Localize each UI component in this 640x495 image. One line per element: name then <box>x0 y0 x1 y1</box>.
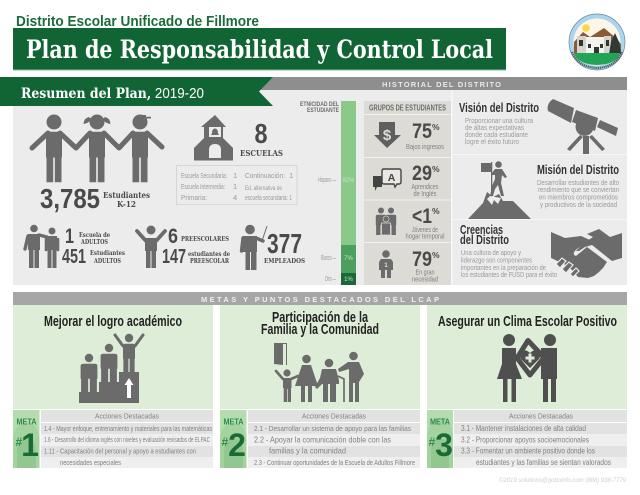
schools count <box>240 118 283 159</box>
ethnicity chart: 92% <box>342 178 355 184</box>
goal 2 badge: 2 <box>228 427 246 463</box>
icon: climber on mountain <box>468 161 531 219</box>
adult school stats: Estudiantes <box>90 249 125 257</box>
icon: three K-12 students <box>32 114 162 182</box>
main title: Plan de Responsabilidad y Control Local <box>26 35 493 64</box>
mission text: rendimiento que se conviertan <box>538 185 619 194</box>
ethnicity chart <box>300 101 356 285</box>
goal 3 actions table <box>454 410 627 468</box>
beliefs heading <box>460 223 509 247</box>
mission text <box>537 178 619 209</box>
goal 2 heading: Participación de la <box>272 309 368 326</box>
panel: goal 2 <box>220 305 420 468</box>
stat: English learners: Aprendices <box>412 184 439 191</box>
preschool stats: PREESCOLARES <box>181 236 229 243</box>
icon: foster family <box>376 208 396 235</box>
icon: low income arrow <box>374 122 401 148</box>
goal 1 badge: META <box>16 416 36 426</box>
panel: goal 1 <box>13 305 213 468</box>
panel divider <box>451 90 452 285</box>
icon: high need student: 1 <box>384 262 388 269</box>
chart heading: ETNICIDAD DEL <box>300 102 339 108</box>
title banner <box>13 28 506 70</box>
goals header label: METAS Y PUNTOS DESTACADOS DEL LCAP <box>201 295 439 304</box>
stat: foster youth: <1 <box>412 205 432 228</box>
goal 2 actions table: familias y la comunidad <box>269 446 346 456</box>
stat: English learners: % <box>432 164 440 174</box>
plan summary ribbon <box>0 77 273 106</box>
stat: high need: 79 <box>412 248 432 271</box>
goal 1 badge: 1 <box>21 427 39 463</box>
vision text: donde cada estudiante <box>465 130 528 139</box>
schools breakdown table: Primaria: <box>181 193 207 202</box>
goal 2 actions table: 2.3 - Continuar oportunidades de la Escuela de Adultos Fillmore <box>254 458 415 467</box>
goal 3 actions table: 3.1 - Mantener instalaciones de alta calidad <box>461 424 586 433</box>
icon: preschool child arms raised <box>137 226 165 268</box>
K-12 students count: Estudiantes <box>103 190 150 200</box>
stat: foster youth <box>406 205 445 240</box>
ethnicity chart: Blanco — <box>321 255 336 262</box>
goal 3 actions table: estudiantes y las familias se sientan valorados <box>476 458 611 467</box>
ethnicity chart: 1% <box>344 277 354 283</box>
stat: high need <box>412 248 440 284</box>
goal 1 badge: # <box>16 435 22 449</box>
goal 1 actions table: Acciones Destacadas <box>95 414 159 420</box>
schools count: ESCUELAS <box>240 149 283 159</box>
mission text: en miembros comprometidos <box>539 192 618 202</box>
icon: teacher with pointer <box>242 225 267 270</box>
goal 2 heading <box>261 309 379 338</box>
stat: high need: En gran <box>416 270 435 276</box>
goal 2 actions table <box>248 410 420 468</box>
icon: handshake <box>551 229 622 278</box>
goal 1 badge <box>13 410 40 468</box>
goal 3 badge <box>427 410 453 468</box>
preschool stats <box>162 225 230 268</box>
goal 3 badge: META <box>430 416 450 426</box>
history header bar <box>259 77 627 90</box>
goal 3 badge: 3 <box>435 427 453 463</box>
beliefs heading: Creencias <box>460 223 503 237</box>
adult school stats: ADULTOS <box>80 238 108 246</box>
student groups panel <box>364 101 451 285</box>
vision text: de altas expectativas <box>465 123 524 132</box>
goal 3 actions table: Acciones Destacadas <box>509 414 573 420</box>
icon: two people forming a heart <box>497 334 557 402</box>
goal 2 actions table: 2.2 - Apoyar la comunicación doble con las <box>254 434 391 444</box>
icon: podium with three people <box>79 334 143 403</box>
schools breakdown table: 4 <box>233 193 237 202</box>
schools count: 8 <box>254 118 268 149</box>
preschool stats: 6 <box>168 225 178 248</box>
beliefs text <box>461 248 557 279</box>
icon: schoolhouse <box>194 115 233 160</box>
icon: two adults <box>25 225 58 268</box>
goal 2 actions table: 2.1 - Desarrollar un sistema de apoyo para las familias <box>254 424 411 433</box>
ethnicity chart: Hispano — <box>318 177 336 184</box>
chart heading <box>300 102 339 114</box>
stat: low income: 75 <box>412 120 432 143</box>
district logo <box>569 14 625 70</box>
beliefs heading: del Distrito <box>460 233 509 247</box>
goal 1 actions table: 1.6 - Desarrollo del idioma inglés con niveles y evaluación revisados de ELPAC <box>44 435 210 444</box>
schools breakdown table: 1 <box>289 171 293 180</box>
adult school stats: 451 <box>62 246 86 268</box>
goal 2 heading: Familia y la Comunidad <box>261 321 379 338</box>
stat: English learners <box>412 162 440 198</box>
ethnicity chart: 7% <box>344 256 354 262</box>
stat: low income: Bajos ingresos <box>406 144 444 151</box>
mission text: y productivos de la sociedad <box>540 200 617 209</box>
staff stats: 377 <box>267 228 302 259</box>
vision text: Proporcionar una cultura <box>465 116 533 125</box>
adult school stats: ADULTOS <box>93 257 121 265</box>
goal 1 actions table: 1.11 - Capacitación del personal y apoyo a estudiantes con <box>44 446 196 456</box>
K-12 students count <box>40 183 150 214</box>
stat: high need: necesidad <box>412 276 438 284</box>
divider <box>452 219 627 220</box>
stat: English learners: de Inglés <box>414 191 437 198</box>
stat: English learners: 29 <box>412 162 432 185</box>
K-12 students count: K-12 <box>117 199 136 209</box>
stat: low income <box>406 120 444 151</box>
stat: low income: % <box>432 122 440 132</box>
icon: language bubbles: A <box>388 172 396 184</box>
goal 1 heading: Mejorar el logro académico <box>44 313 182 330</box>
panel: mission <box>468 161 619 219</box>
icon: high need student <box>379 250 393 278</box>
schools breakdown table: escuela secundaria: 1 <box>245 195 292 202</box>
district name: Distrito Escolar Unificado de Fillmore <box>16 14 259 30</box>
schools breakdown table: Continuación: <box>245 171 285 180</box>
goals header bar <box>13 292 627 305</box>
icon: telescope <box>548 99 618 154</box>
staff stats <box>264 228 305 265</box>
goal 3 actions table: 3.2 - Proporcionar apoyos socioemocionales <box>461 436 589 444</box>
icon: door and family <box>274 343 364 402</box>
history header label: HISTORIAL DEL DISTRITO <box>382 80 501 89</box>
stat: foster youth: hogar temporal <box>406 234 445 240</box>
beliefs text: importantes en la preparación de <box>461 263 546 272</box>
beliefs text: Una cultura de apoyo y <box>461 248 521 257</box>
goal 1 actions table: necesidades especiales <box>60 458 121 467</box>
preschool stats: PREESCOLAR <box>190 258 230 265</box>
staff stats: EMPLEADOS <box>264 257 305 265</box>
icon: low income arrow: $ <box>383 127 392 144</box>
adult school stats: Escuela de <box>79 231 110 239</box>
vision text: logre el éxito futuro <box>465 137 519 146</box>
schools breakdown table: Escuela Secundaria: <box>181 171 227 180</box>
stat: high need: % <box>432 250 440 260</box>
groups heading: GRUPOS DE ESTUDIANTES <box>369 104 446 112</box>
goal 1 actions table: 1.4 - Mayor enfoque, entrenamiento y materiales para las matemáticas <box>44 424 212 433</box>
icon: language bubbles <box>373 169 401 191</box>
schools breakdown table: 1 <box>233 171 237 180</box>
ethnicity chart: Otro — <box>325 276 336 283</box>
goal 2 badge: # <box>222 435 228 449</box>
preschool stats: 147 <box>162 246 186 268</box>
schools breakdown table: Ed. alternativa de <box>245 185 282 192</box>
adult school stats: 1 <box>65 225 74 248</box>
goal 3 actions table: 3.3 - Fomentar un ambiente positivo donde los <box>461 446 595 456</box>
section background panel <box>13 90 627 285</box>
panel: goal 3 <box>427 305 627 468</box>
ribbon label: Resumen del Plan, 2019-20 <box>21 86 204 102</box>
beliefs text: los estudiantes de FUSD para el éxito <box>461 270 557 279</box>
footer credit: ©2019 solutions@goboinfo.com (888) 938-7779 <box>499 476 626 484</box>
panel: beliefs <box>460 223 622 279</box>
beliefs text: liderazgo son componentes <box>461 256 532 264</box>
vision text <box>465 116 533 146</box>
vision heading: Visión del Distrito <box>459 101 539 115</box>
adult school stats <box>62 225 125 268</box>
goal 3 badge: # <box>428 435 436 449</box>
stat: foster youth: % <box>432 206 440 216</box>
mission text: Desarrollar estudiantes de alto <box>537 178 619 187</box>
schools breakdown table: 1 <box>233 182 237 191</box>
goal 2 badge <box>220 410 246 468</box>
goal 2 badge: META <box>224 416 244 426</box>
schools breakdown table <box>176 166 297 204</box>
goal 1 actions table <box>41 410 213 468</box>
panel: vision <box>452 90 627 154</box>
goal 2 actions table: Acciones Destacadas <box>302 414 366 420</box>
divider <box>452 154 627 155</box>
K-12 students count: 3,785 <box>40 183 100 214</box>
schools breakdown table: Escuela Intermedia: <box>181 182 225 191</box>
chart heading: ESTUDIANTE <box>307 108 339 114</box>
stat: foster youth: Jóvenes de <box>412 227 438 234</box>
preschool stats: estudiantes de <box>188 250 230 258</box>
